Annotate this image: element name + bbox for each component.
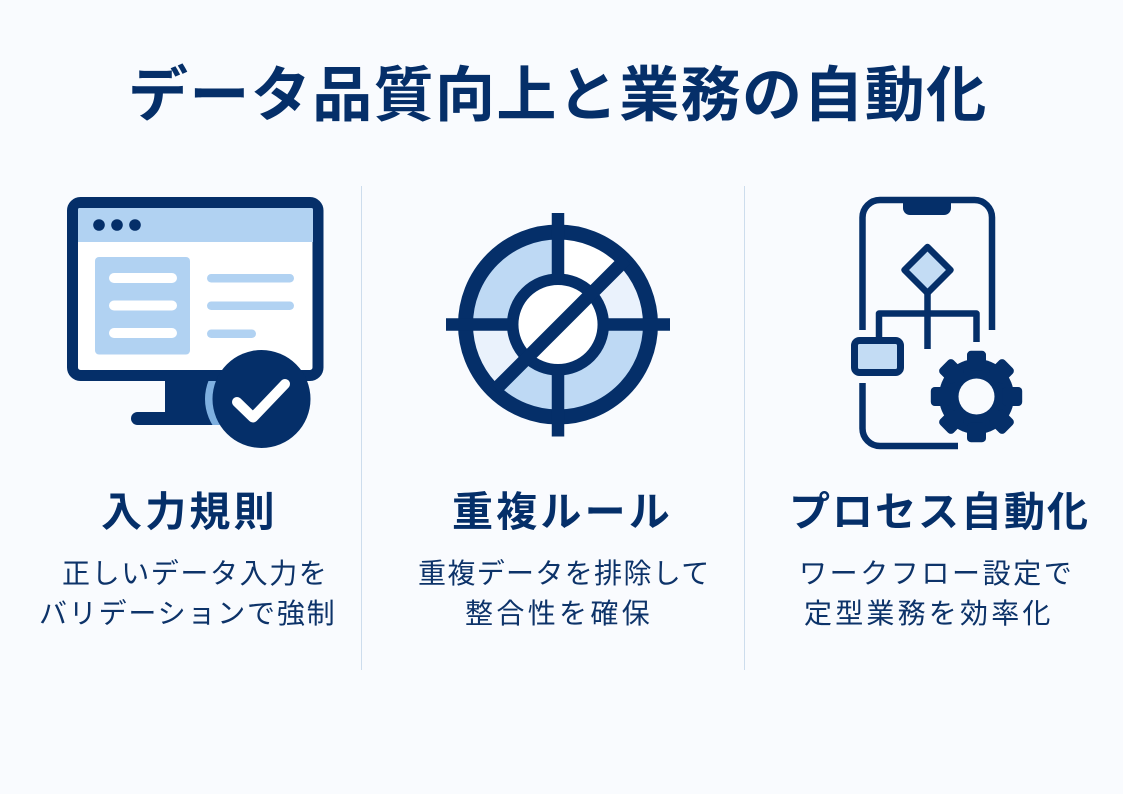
heading: duplicate rules: 重複ルール — [452, 489, 673, 535]
text: duplicate rules description — [418, 558, 711, 628]
heading: process automation: プロセス自動化 — [789, 489, 1090, 535]
title: データ品質向上と業務の自動化 — [128, 62, 988, 129]
text: process automation description: ワークフロー設定で — [799, 558, 1074, 589]
text: process automation description: 定型業務を効率化 — [804, 598, 1054, 628]
text: input rules description: 正しいデータ入力を — [62, 558, 328, 589]
text: input rules description — [39, 558, 336, 628]
text: duplicate rules description: 整合性を確保 — [465, 598, 653, 628]
icon: target with slash — [446, 213, 670, 436]
icon: phone with workflow and gear — [854, 199, 1022, 446]
text: input rules description: バリデーションで強制 — [39, 598, 336, 628]
icon: gear — [931, 351, 1022, 442]
heading: input rules: 入力規則 — [101, 489, 278, 535]
text: process automation description — [799, 558, 1074, 628]
text: duplicate rules description: 重複データを排除して — [418, 558, 711, 589]
icon: monitor with check — [72, 202, 318, 448]
